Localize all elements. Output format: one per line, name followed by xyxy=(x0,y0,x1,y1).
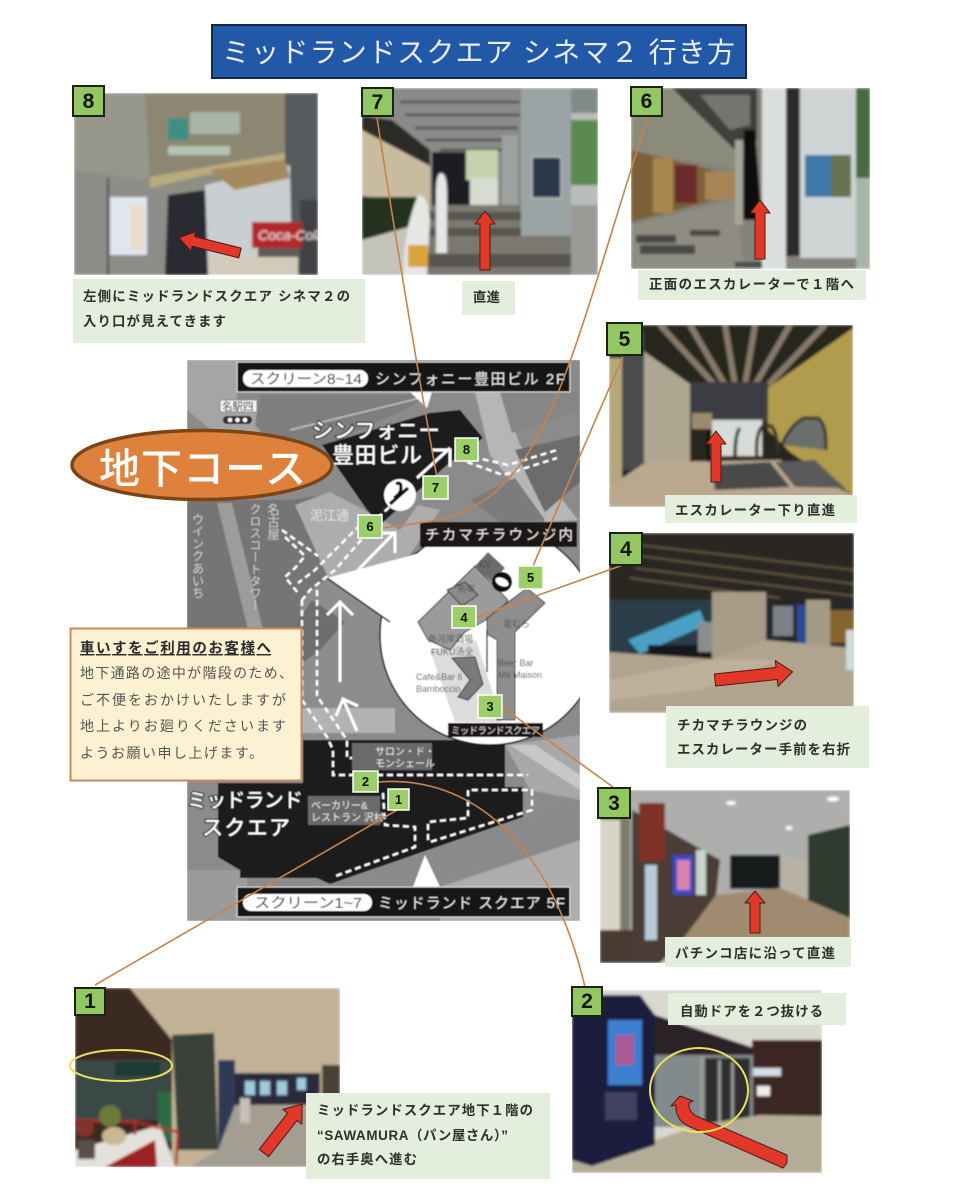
symphony toyota building xyxy=(322,410,483,525)
step markers on map: 1 xyxy=(395,792,402,807)
building label: シンフォニー豊田ビル: シンフォニー xyxy=(312,420,440,443)
photo 3: pachinko corridor xyxy=(600,790,850,963)
connector lines from map to photos xyxy=(95,116,648,987)
speech bubble inset: 魚河岸酒場 xyxy=(428,633,473,644)
wheelchair notice: 地下通路の途中が階段のため、 xyxy=(80,665,293,681)
photo 6: escalator to 1F xyxy=(631,88,870,269)
tenant: サロン・ド・モンシェール: サロン・ド・ xyxy=(375,746,435,758)
caption 6: 正面のエスカレーターで１階へ xyxy=(649,277,854,292)
photo 2: automatic doors xyxy=(572,990,822,1173)
label: screens 8-14: シンフォニー豊田ビル 2F xyxy=(375,371,565,388)
speech bubble inset: 鳥宰 xyxy=(457,583,475,594)
photo 8: cinema entrance: Coca-Cola xyxy=(258,227,324,243)
speech bubble inset: FUKU汤全 xyxy=(431,646,474,657)
photo 4: chikamachi lounge xyxy=(609,533,856,713)
station label: 名駅四 xyxy=(220,400,257,424)
caption 2 xyxy=(668,993,846,1025)
caption 5: エスカレーター下り直進 xyxy=(675,503,836,518)
wheelchair notice xyxy=(70,628,302,780)
building label: ミッドランドスクエア xyxy=(187,790,303,840)
map text: surrounding streets and buildings: クロスコートタワー xyxy=(248,503,262,611)
photo 8: cinema entrance xyxy=(74,93,324,275)
red arrows on photos xyxy=(176,200,794,1168)
step markers on map: 4 xyxy=(460,610,468,625)
caption 1: ミッドランドスクエア地下１階の xyxy=(317,1102,533,1118)
caption 3: パチンコ店に沿って直進 xyxy=(675,945,836,961)
label: チカマチラウンジ内 xyxy=(420,522,577,547)
wheelchair notice: ようお願い申し上げます。 xyxy=(80,745,263,761)
step badges on photos xyxy=(73,86,662,1016)
caption 7: 直進 xyxy=(473,290,501,305)
caption 8 xyxy=(73,279,365,343)
label: screens 8-14: スクリーン8~14 xyxy=(250,371,362,388)
map text: surrounding streets and buildings xyxy=(190,502,349,611)
tenant: ベーカリー&レストラン沢村: ベーカリー& xyxy=(311,800,368,812)
caption 1: “SAWAMURA（パン屋さん）” xyxy=(317,1128,508,1143)
title: ミッドランドスクエア シネマ２ 行き方 xyxy=(222,37,735,68)
step markers on map: 7 xyxy=(432,480,439,495)
icon: white pointer triangle xyxy=(413,855,440,887)
wheelchair notice: ご不便をおかけいたしますが xyxy=(80,692,286,708)
route map xyxy=(187,360,600,921)
wheelchair notice: 車いすをご利用のお客様へ xyxy=(80,639,271,657)
caption 3 xyxy=(665,937,851,967)
speech bubble inset xyxy=(326,546,580,746)
caption 1 xyxy=(306,1093,550,1179)
speech bubble inset: 竜むら xyxy=(503,618,530,629)
step markers on map: 8 xyxy=(463,442,470,457)
label: screens 1-7: ミッドランド スクエア 5F xyxy=(378,895,565,912)
map text: surrounding streets and buildings: ウインクあいち xyxy=(190,513,204,599)
step badges on photos: 6 xyxy=(641,90,652,113)
step badges on photos: 2 xyxy=(581,990,593,1013)
step badges on photos: 5 xyxy=(619,328,631,351)
caption 4: チカマチラウンジの xyxy=(677,718,807,733)
caption 7 xyxy=(462,281,515,315)
caption 2: 自動ドアを２つ抜ける xyxy=(680,1003,823,1019)
caption 8: 入り口が見えてきます xyxy=(83,313,226,329)
caption 6 xyxy=(638,270,866,300)
step markers on map: 2 xyxy=(362,774,369,789)
caption 4: エスカレーター手前を右折 xyxy=(677,741,850,757)
speech bubble inset: Ma Maison xyxy=(498,670,542,680)
speech bubble inset: Cafe&Bar Il xyxy=(416,672,462,682)
label: ミッドランドスクエア inset: ミッドランドスクエア xyxy=(451,726,540,737)
midland square building xyxy=(218,740,523,884)
step markers on map xyxy=(353,438,543,810)
highlight ellipses xyxy=(70,1048,748,1132)
label: screens 1-7 xyxy=(237,887,570,917)
photo 7: straight corridor xyxy=(362,88,598,275)
tenant: ベーカリー&レストラン沢村 xyxy=(308,796,384,825)
tenant: サロン・ド・モンシェール xyxy=(352,743,435,770)
building label: ミッドランドスクエア: スクエア xyxy=(202,817,290,840)
oval heading: underground course: 地下コース xyxy=(99,446,306,492)
station label: 名駅四: 名駅四 xyxy=(222,400,254,413)
label: screens 8-14 xyxy=(237,362,570,392)
tenant: サロン・ド・モンシェール: モンシェール xyxy=(375,759,435,770)
step badges on photos: 8 xyxy=(83,90,95,113)
tenant: ベーカリー&レストラン沢村: レストラン 沢村 xyxy=(311,811,384,824)
speech bubble inset: EV xyxy=(479,559,491,569)
walking routes xyxy=(282,450,557,877)
speech bubble inset: Bamboccio xyxy=(416,684,461,694)
step markers on map: 5 xyxy=(527,570,534,585)
icon: no smoking xyxy=(492,572,512,592)
step badges on photos: 1 xyxy=(84,990,96,1013)
caption 1: の右手奥へ進む xyxy=(317,1151,417,1167)
label: チカマチラウンジ内: チカマチラウンジ内 xyxy=(425,527,573,544)
map text: surrounding streets and buildings: 泥江通 xyxy=(310,508,349,523)
caption 5 xyxy=(665,495,857,523)
title xyxy=(212,25,746,78)
step badges on photos: 7 xyxy=(372,91,383,114)
speech bubble inset: Beer Bar xyxy=(498,658,534,668)
step badges on photos: 4 xyxy=(620,538,632,561)
caption 4 xyxy=(666,706,869,768)
step markers on map: 3 xyxy=(486,699,494,714)
oval heading: underground course xyxy=(72,430,332,500)
step markers on map: 6 xyxy=(366,519,374,534)
icon: escalator xyxy=(384,479,416,511)
caption 8: 左側にミッドランドスクエア シネマ２の xyxy=(83,288,350,304)
building label: シンフォニー豊田ビル: 豊田ビル xyxy=(332,443,422,468)
building label: ミッドランドスクエア: ミッドランド xyxy=(187,790,303,812)
map text: surrounding streets and buildings: 名古屋 xyxy=(265,502,279,541)
white direction arrows xyxy=(327,448,450,731)
photo 1: sawamura bakery xyxy=(75,988,340,1167)
label: screens 1-7: スクリーン1~7 xyxy=(254,895,362,912)
photo 5: escalator down xyxy=(609,325,853,507)
wheelchair notice: 地上よりお廻りくださいます xyxy=(80,718,286,734)
step badges on photos: 3 xyxy=(608,792,620,815)
building label: シンフォニー豊田ビル xyxy=(312,420,440,468)
